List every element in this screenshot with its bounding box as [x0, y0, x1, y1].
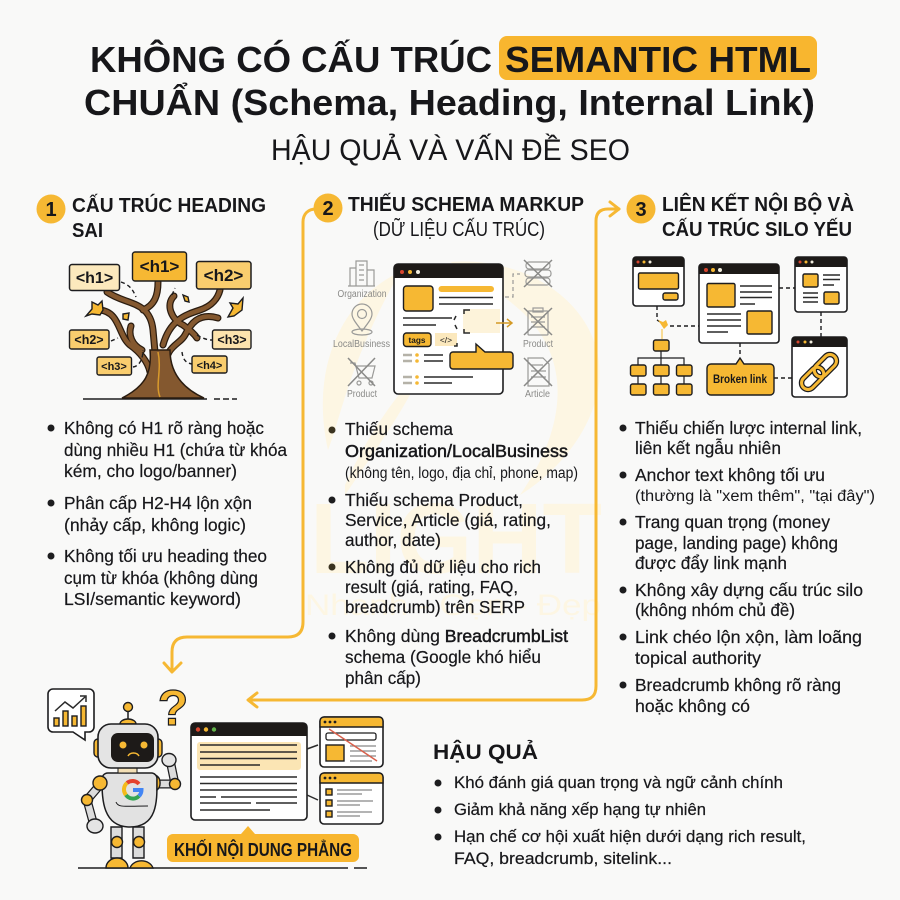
bullet list: internal link issues: page, landing page) không: [635, 533, 838, 553]
section 1 heading: 1: [45, 199, 57, 221]
icon: chart speech bubble: [48, 689, 94, 740]
robot body: [82, 702, 180, 868]
bullet list: heading issues: [48, 418, 287, 609]
side panel: checklist: [307, 773, 383, 824]
panel: schema markup: [314, 193, 584, 688]
bullet list: schema issues: author, date): [345, 530, 441, 550]
label: flat content block: KHỐI NỘI DUNG PHẲNG: [174, 839, 352, 860]
section 2 heading: (DỮ LIỆU CẤU TRÚC): [373, 217, 545, 241]
bullet list: schema issues: result (giá, rating, FAQ,: [345, 577, 518, 597]
bullet list: internal link issues: Link chéo lộn xộn, làm loãng: [635, 627, 862, 647]
window: top left: [633, 257, 684, 306]
bullet list: schema issues: breadcrumb) trên SERP: [345, 597, 525, 617]
icon: broken heading tree: [70, 252, 251, 399]
bullet list: internal link issues: Trang quan trọng (money: [635, 512, 830, 532]
title: SEMANTIC HTML: [505, 39, 811, 80]
icon: crossed clipboard: [523, 308, 553, 350]
arrow: section 3 to consequence: [248, 202, 619, 707]
icon: crossed document: Article: [525, 389, 550, 400]
bullet list: heading issues: Không có H1 rõ ràng hoặc: [64, 418, 264, 438]
callout: broken link: Broken link: [713, 372, 767, 386]
bullet list: schema issues: Organization/LocalBusiness: [345, 441, 568, 461]
bullet list: internal link issues: (thường là "xem thêm", "tại đây"): [635, 488, 875, 505]
bullet list: schema issues: schema (Google khó hiểu: [345, 647, 541, 667]
callout: broken link: [707, 358, 774, 395]
consequences heading: HẬU QUẢ: [433, 740, 538, 764]
watermark: LIGHT: [310, 483, 602, 595]
illustration: confused Google robot: [48, 680, 383, 868]
label: flat content block: [167, 826, 359, 862]
bullet list: heading issues: LSI/semantic keyword): [64, 589, 241, 609]
icon: broken heading tree: <h3>: [217, 333, 247, 347]
bullet list: schema issues: phân cấp): [345, 668, 421, 688]
bullet list: heading issues: Không tối ưu heading theo: [64, 546, 267, 566]
icon: organization building: [338, 261, 386, 300]
bullet list: internal link issues: liên kết ngẫu nhiên: [635, 437, 781, 458]
icon: Google G logo: [124, 781, 142, 799]
bullet list: heading issues: Phân cấp H2-H4 lộn xộn: [64, 493, 252, 513]
title: [84, 36, 817, 167]
diagram: site link structure: [630, 257, 847, 397]
bullet list: heading issues: kém, cho logo/banner): [64, 461, 237, 481]
panel: heading structure: [36, 193, 287, 609]
icon: question mark: ?: [158, 680, 188, 736]
bullet list: internal link issues: hoặc không có: [635, 696, 750, 716]
panel: internal links and silo: [48, 192, 875, 868]
bullet list: schema issues: (không tên, logo, địa chỉ, phone, map): [345, 465, 578, 482]
window: top right: [795, 257, 847, 312]
title: KHÔNG CÓ CẤU TRÚC: [90, 38, 492, 80]
icon: local business pin: LocalBusiness: [333, 339, 390, 350]
bullet list: internal link issues: Thiếu chiến lược internal link,: [635, 418, 862, 438]
icon: crossed cart: [347, 358, 377, 400]
bullet list: schema issues: Không dùng BreadcrumbList: [345, 626, 568, 646]
section 1 heading: CẤU TRÚC HEADING: [72, 193, 266, 217]
icon: broken heading tree: <h1>: [140, 257, 179, 276]
bullet list: internal link issues: topical authority: [635, 648, 761, 668]
section 3 heading: LIÊN KẾT NỘI BỘ VÀ: [662, 192, 854, 216]
section 2 heading: THIẾU SCHEMA MARKUP: [348, 193, 584, 216]
consequences list: Giảm khả năng xếp hạng tự nhiên: [454, 801, 706, 819]
bullet list: internal link issues: Breadcrumb không rõ ràng: [635, 675, 841, 695]
bullet list: internal link issues: (không nhóm chủ đề): [635, 600, 795, 620]
bullet list: schema issues: Không đủ dữ liệu cho rich: [345, 557, 541, 577]
title highlight: [499, 36, 817, 80]
section 1 heading: [36, 193, 266, 242]
bullet list: heading issues: dùng nhiều H1 (chứa từ khóa: [64, 440, 287, 460]
bullet list: internal link issues: Không xây dựng cấu trúc silo: [635, 580, 863, 600]
illustration: web page without schema: </>: [440, 335, 452, 345]
bullet list: internal link issues: được đẩy link mạnh: [635, 553, 787, 573]
icon: broken heading tree: <h3>: [101, 361, 127, 373]
icon: organization building: Organization: [338, 289, 386, 300]
bullet list: internal link issues: [620, 418, 875, 716]
panel: consequences: [433, 740, 806, 868]
consequences list: [434, 774, 806, 868]
icon: broken heading tree: <h1>: [76, 270, 113, 287]
consequences list: Khó đánh giá quan trọng và ngữ cảnh chính: [454, 774, 783, 792]
main flat content page: [191, 723, 307, 820]
bullet list: heading issues: (nhảy cấp, không logic): [64, 515, 246, 535]
arrow: section 2 to consequence: [164, 209, 316, 672]
bullet list: schema issues: Thiếu schema: [345, 419, 453, 439]
section 3 heading: 3: [635, 199, 647, 221]
bullet list: schema issues: Thiếu schema Product,: [345, 490, 523, 510]
illustration: web page without schema: [394, 264, 520, 394]
section 2 heading: [314, 193, 584, 241]
watermark: Nhanh - Gọn - Đẹp: [305, 589, 601, 622]
window: chain link: [792, 337, 847, 397]
diagram: silo tree: [630, 340, 692, 395]
icon: broken heading tree: <h2>: [204, 266, 243, 285]
icon: broken heading tree: <h2>: [74, 333, 104, 347]
consequences list: Hạn chế cơ hội xuất hiện dưới dạng rich result,: [454, 828, 806, 846]
title: HẬU QUẢ VÀ VẤN ĐỀ SEO: [271, 133, 630, 167]
consequences list: FAQ, breadcrumb, sitelink...: [454, 850, 672, 868]
watermark: [305, 261, 602, 622]
window: center page: [699, 264, 779, 343]
icon: broken heading tree: <h4>: [197, 360, 222, 372]
bullet list: schema issues: Service, Article (giá, rating,: [345, 510, 551, 530]
illustration: web page without schema: tags: [408, 335, 426, 345]
section 2 heading: 2: [322, 198, 334, 220]
icon: crossed stack: [524, 260, 552, 287]
icon: crossed clipboard: Product: [523, 339, 553, 350]
section 1 heading: SAI: [72, 220, 103, 242]
ground line: [78, 867, 367, 869]
side panel: crossed-out layout: [307, 717, 383, 767]
section 3 heading: [626, 192, 854, 241]
bullet list: internal link issues: Anchor text không tối ưu: [635, 465, 825, 485]
section 3 heading: CẤU TRÚC SILO YẾU: [662, 217, 852, 241]
icon: crossed cart: Product: [347, 389, 377, 400]
icon: local business pin: [333, 304, 390, 350]
bullet list: heading issues: cụm từ khóa (không dùng: [64, 568, 258, 588]
icon: crossed document: [524, 358, 552, 400]
bullet list: schema issues: [328, 419, 578, 688]
title: CHUẨN (Schema, Heading, Internal Link): [84, 81, 815, 123]
